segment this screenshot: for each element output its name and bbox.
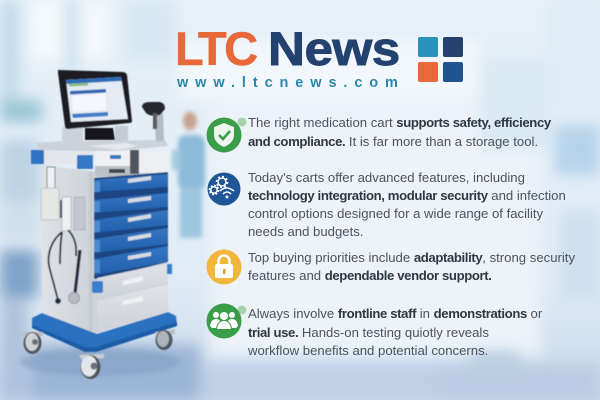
grey drawers — [92, 263, 172, 333]
monitor — [58, 70, 132, 142]
text: frontline staff: workflow benefits and potential concerns. — [248, 343, 488, 358]
text: buying priorities: Top buying priorities include adaptability, strong security — [248, 250, 575, 265]
worktop — [31, 140, 170, 176]
logo url: www.ltcnews.com — [177, 75, 405, 91]
text: advanced features — [248, 170, 566, 239]
side accessories — [41, 167, 85, 231]
logo — [175, 22, 463, 91]
text: right cart — [248, 115, 552, 149]
barcode scanner — [142, 102, 165, 141]
logo wordmark: News — [268, 22, 400, 75]
cart body — [42, 160, 168, 334]
text: right cart: and compliance. It is far more than a storage tool. — [248, 134, 538, 149]
blue drawers — [94, 172, 168, 279]
logo squares — [418, 37, 463, 82]
casters — [22, 329, 175, 379]
icon: padlock — [206, 250, 242, 284]
icon: gears and wifi — [208, 172, 240, 206]
text: advanced features: control options designed for a wide range of facility — [248, 206, 543, 221]
text: buying priorities — [248, 250, 575, 283]
text: right cart: The right medication cart supports safety, efficiency — [248, 115, 551, 130]
text: advanced features: needs and budgets. — [248, 224, 363, 239]
icon: group of people — [206, 304, 246, 338]
text: frontline staff: Always involve frontline staff in demonstrations or — [248, 306, 542, 321]
blurred nurse figure — [172, 112, 205, 238]
logo wordmark: LTC — [175, 22, 256, 75]
text: frontline staff — [248, 306, 542, 358]
icon: shield check — [206, 118, 246, 152]
text: advanced features: Today's carts offer advanced features, including — [248, 170, 525, 185]
text: frontline staff: trial use. Hands-on testing quiotly reveals — [248, 325, 489, 340]
text: buying priorities: features and dependable vendor support. — [248, 268, 492, 283]
logo wordmark — [175, 22, 400, 75]
stethoscope — [49, 230, 80, 304]
cart base — [32, 312, 177, 352]
text: advanced features: technology integration, modular security and infection — [248, 188, 566, 203]
